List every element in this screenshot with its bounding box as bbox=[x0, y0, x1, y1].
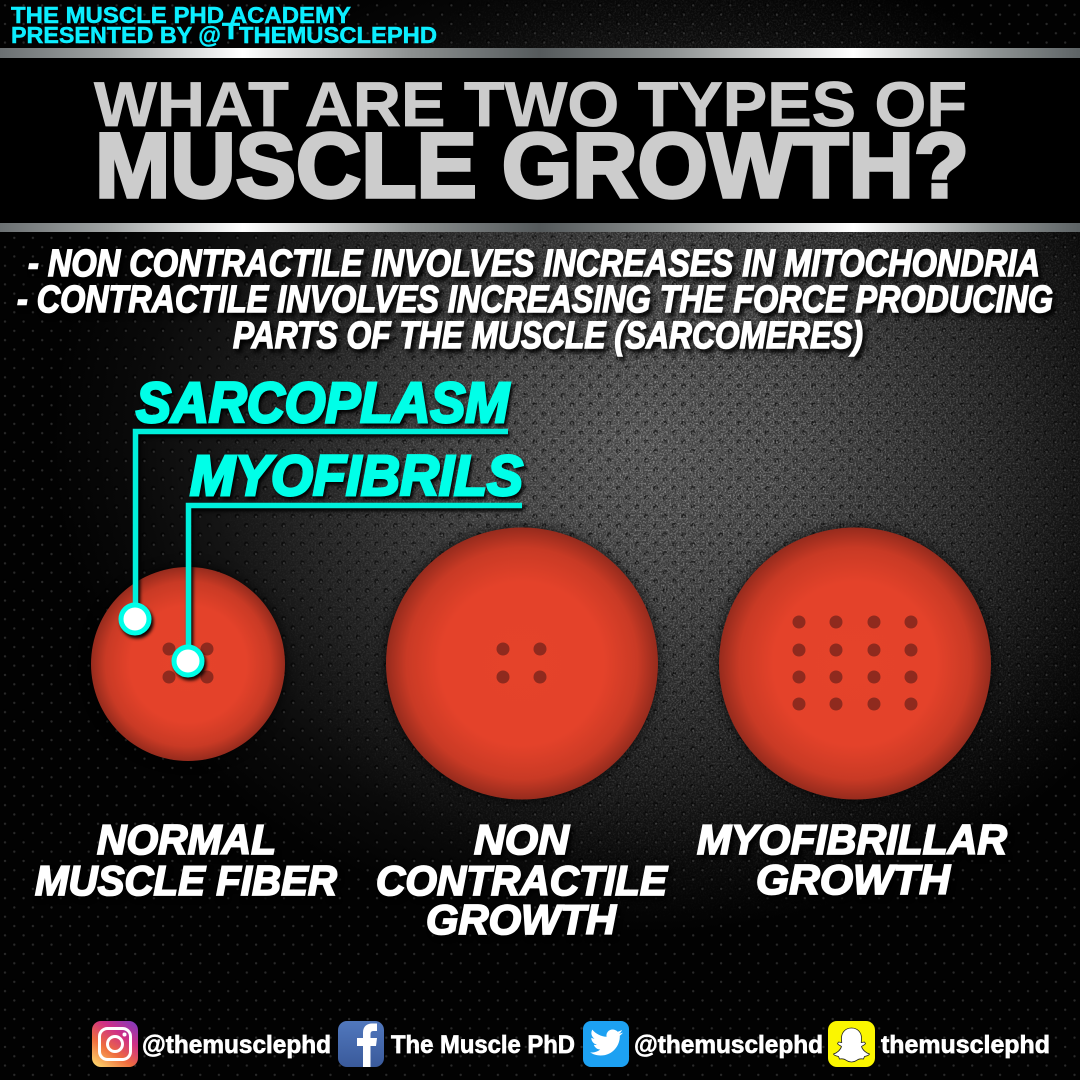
fiber: myofibrillar growth bbox=[719, 528, 991, 800]
label: non contractile growth bbox=[376, 816, 669, 943]
header credit text: PRESENTED BY @ bbox=[11, 22, 221, 48]
label: normal muscle fiber bbox=[35, 816, 338, 904]
social text: facebook name: The Muscle PhD bbox=[391, 1031, 575, 1059]
title banner: MUSCLE GROWTH? bbox=[95, 115, 969, 217]
label: myofibrillar growth: GROWTH bbox=[756, 856, 952, 903]
social text: snapchat handle: themusclephd bbox=[881, 1031, 1050, 1059]
label: non contractile growth: NON bbox=[474, 816, 571, 863]
title banner bbox=[0, 48, 1080, 232]
callout: myofibrils: MYOFIBRILS bbox=[190, 444, 523, 508]
icon: instagram bbox=[92, 1021, 138, 1067]
explanation text bbox=[17, 243, 1053, 357]
label: myofibrillar growth: MYOFIBRILLAR bbox=[697, 816, 1008, 863]
social text: instagram handle: @themusclephd bbox=[142, 1031, 331, 1059]
header credit text: THEMUSCLEPHD bbox=[239, 22, 437, 48]
label: non contractile growth: CONTRACTILE bbox=[376, 857, 669, 904]
callout: sarcoplasm bbox=[121, 371, 510, 633]
label: normal muscle fiber: NORMAL bbox=[97, 816, 276, 863]
callout: sarcoplasm: SARCOPLASM bbox=[136, 371, 510, 435]
explanation text: PARTS OF THE MUSCLE (SARCOMERES) bbox=[233, 315, 863, 357]
fiber: non contractile growth bbox=[386, 528, 658, 800]
icon: snapchat bbox=[828, 1021, 875, 1067]
fiber: normal muscle fiber bbox=[91, 567, 285, 761]
header credit text: THE MUSCLE PHD ACADEMY bbox=[11, 2, 351, 28]
header credit text bbox=[11, 2, 437, 48]
social text: twitter handle: @themusclephd bbox=[634, 1031, 823, 1059]
callout: myofibrils bbox=[174, 444, 523, 675]
label: non contractile growth: GROWTH bbox=[426, 896, 618, 943]
icon: facebook bbox=[338, 1021, 384, 1067]
label: myofibrillar growth bbox=[697, 816, 1008, 903]
icon: twitter bbox=[583, 1021, 629, 1067]
title banner: WHAT ARE TWO TYPES OF bbox=[94, 70, 967, 140]
header credit text: T bbox=[222, 18, 241, 44]
label: normal muscle fiber: MUSCLE FIBER bbox=[35, 857, 338, 904]
